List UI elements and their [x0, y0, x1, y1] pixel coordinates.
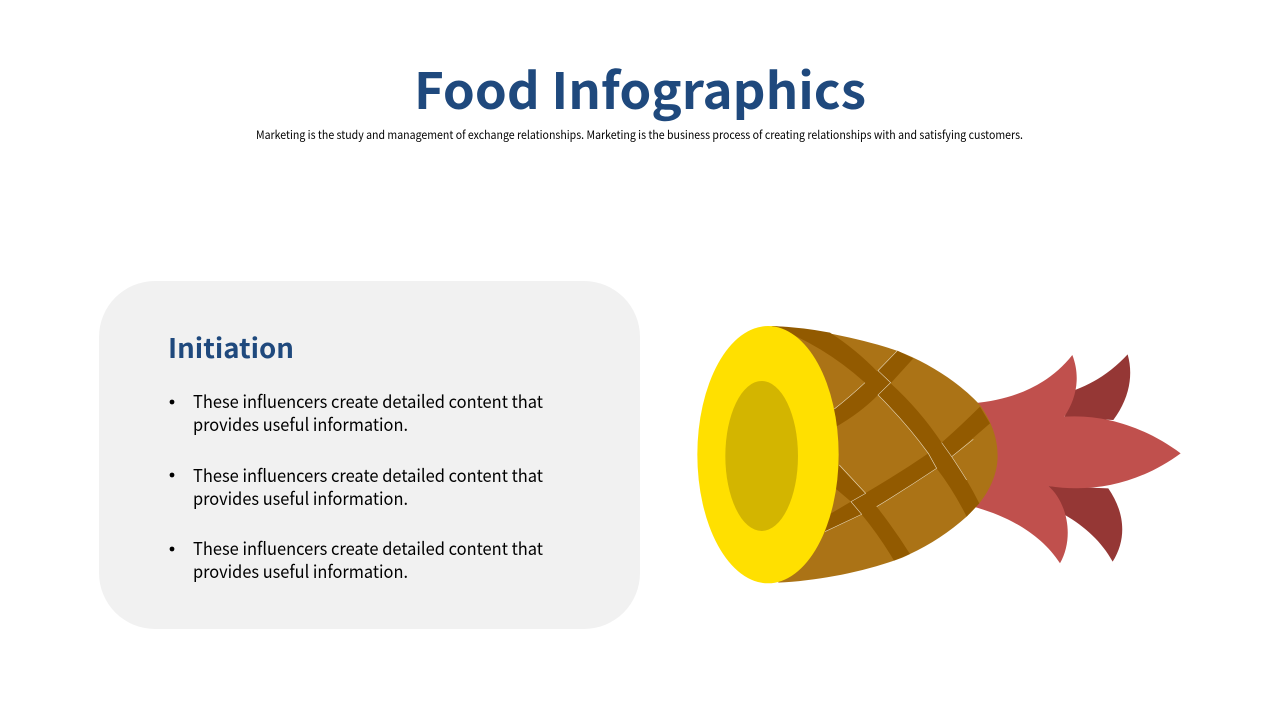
subtitle: Marketing is the study and management of exchange relationships. Marketing is the business process of creating relationships with and satisfying customers. — [256, 127, 1023, 143]
bullet item 2: These influencers create detailed content that — [193, 463, 543, 488]
bullet item 1 — [170, 389, 543, 437]
bullet item 3: provides useful information. — [193, 559, 408, 584]
bullet item 3: These influencers create detailed content that — [193, 536, 543, 561]
panel heading: Initiation — [168, 327, 294, 366]
bullet item 1: provides useful information. — [193, 412, 408, 437]
bullet item 1: These influencers create detailed content that — [193, 389, 543, 414]
cut face — [697, 326, 839, 583]
highlight lines — [825, 351, 973, 532]
pineapple leaves — [973, 354, 1181, 563]
bullet item 2: provides useful information. — [193, 486, 408, 511]
pineapple body — [697, 326, 998, 583]
core — [725, 381, 798, 531]
diamond bands — [772, 326, 990, 561]
bullet item 2 — [170, 463, 543, 511]
title: Food Infographics — [414, 52, 866, 124]
panel: initiation — [99, 281, 640, 629]
bullet item 3 — [170, 536, 543, 584]
icon: pineapple — [697, 326, 1181, 583]
